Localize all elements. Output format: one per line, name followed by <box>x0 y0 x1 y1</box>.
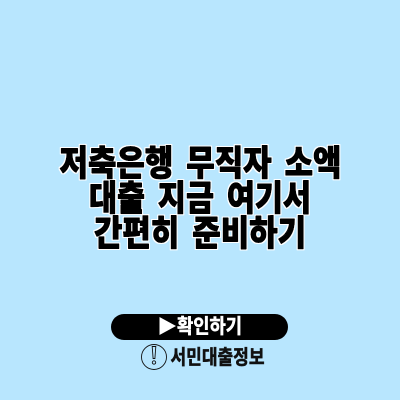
title line 1: 저축은행 무직자 소액 <box>60 144 342 184</box>
brand name: 서민대출정보 <box>170 346 264 369</box>
title line 2: 대출 지금 여기서 <box>89 180 311 218</box>
title line 3: 간편히 준비하기 <box>94 214 306 254</box>
icon: exclamation circle <box>142 344 166 370</box>
button background <box>111 314 288 340</box>
brand <box>142 344 264 370</box>
title <box>60 144 342 254</box>
play icon <box>160 317 176 335</box>
button: confirm <box>111 314 288 340</box>
button label: 확인하기 <box>177 315 242 338</box>
